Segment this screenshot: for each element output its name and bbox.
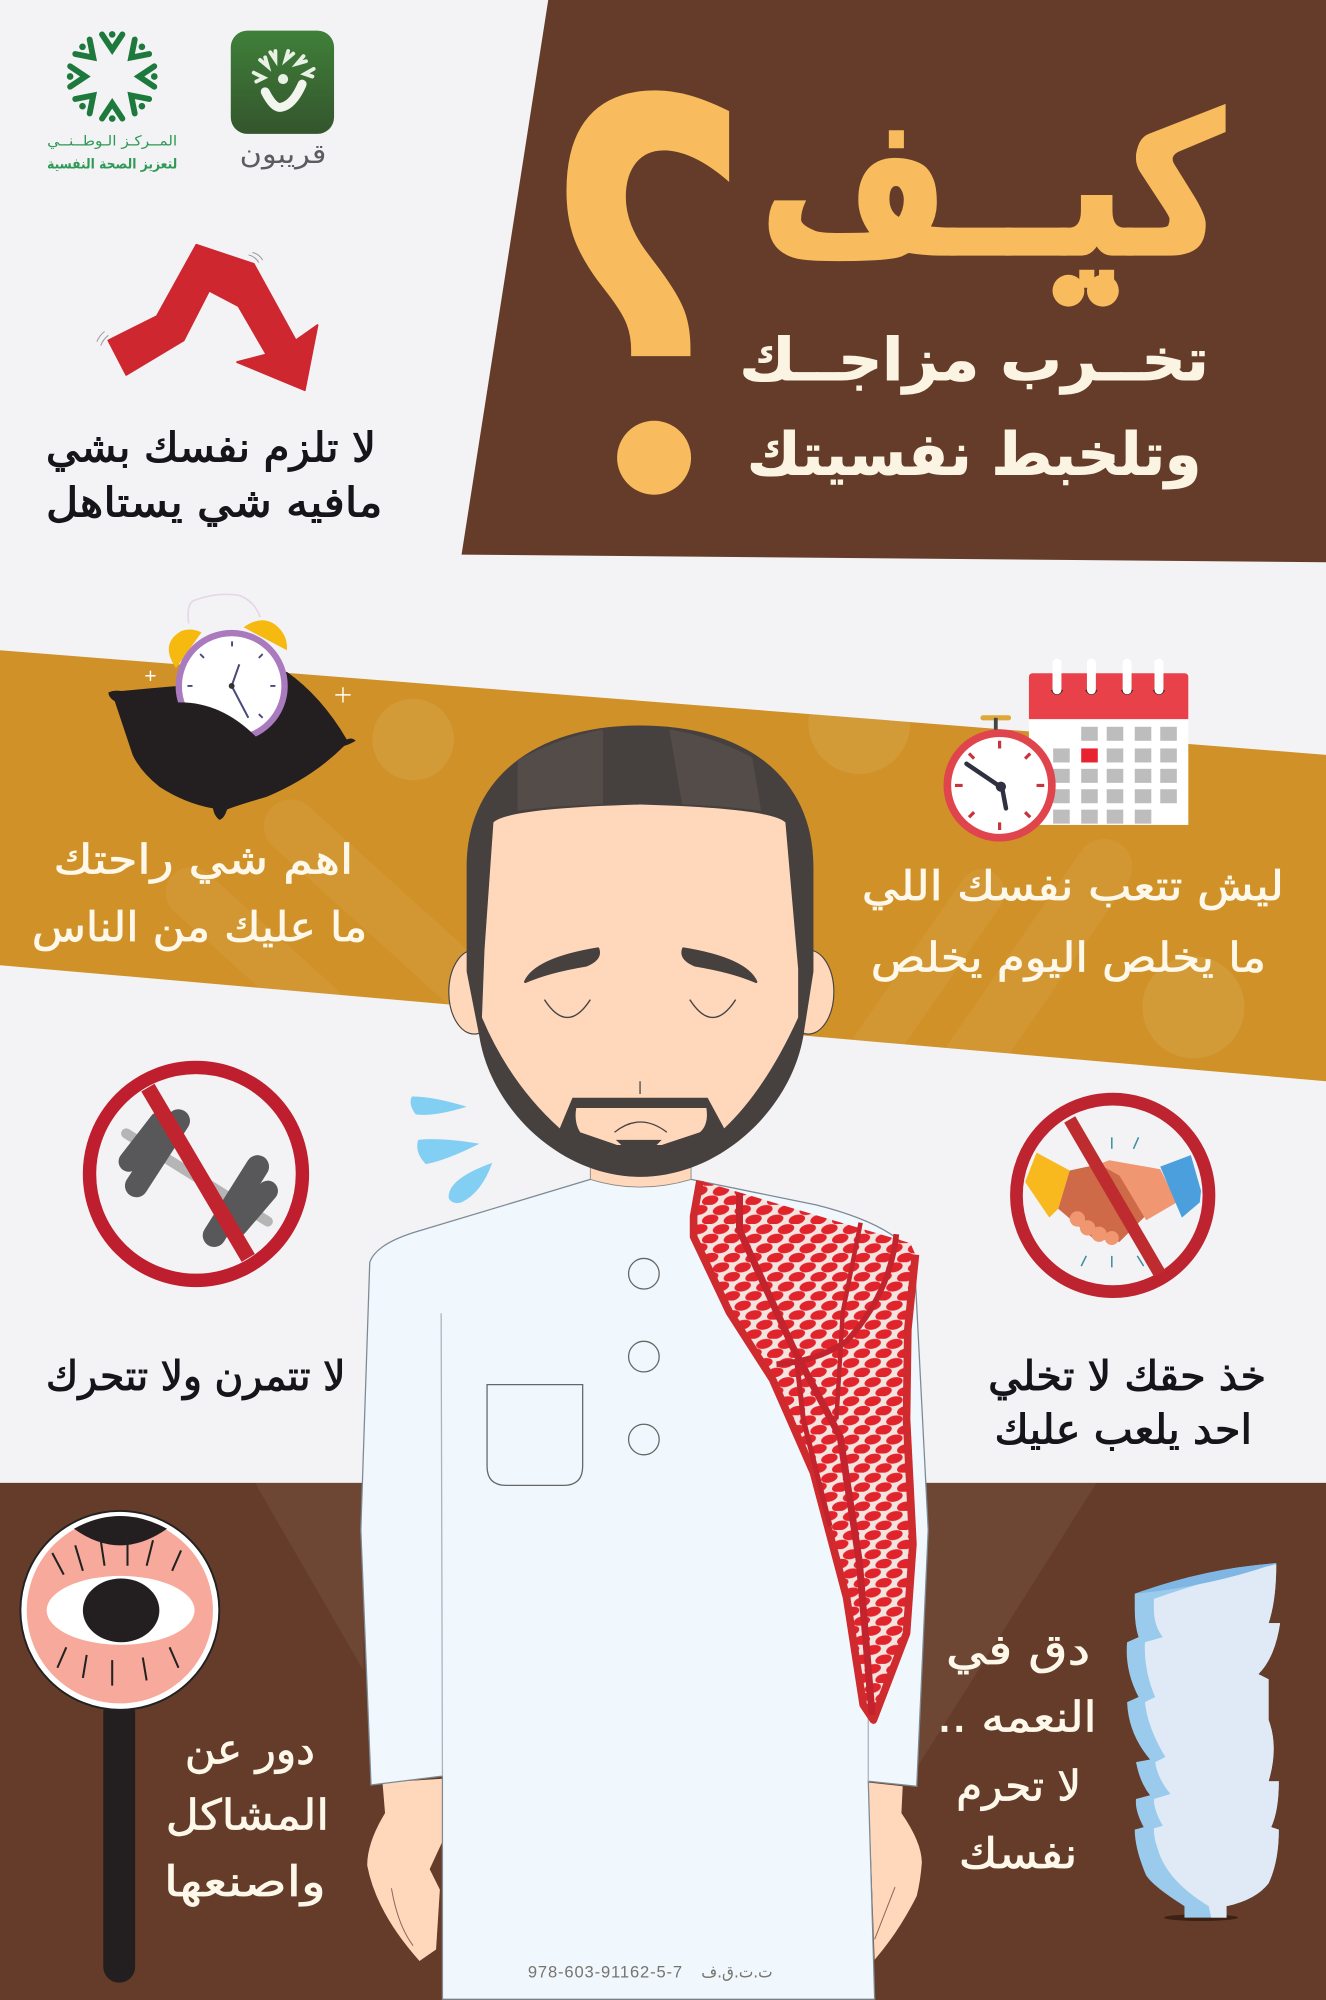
logo: qareeboon app bbox=[231, 31, 334, 170]
illustration: man bbox=[361, 725, 928, 1999]
text: isbn: ت.ت.ق.ف bbox=[701, 1963, 773, 1982]
text: your comfort matters: اهم شي راحتك bbox=[54, 835, 353, 883]
text: center name line 2: لتعزيز الصحة النفسية bbox=[47, 156, 177, 172]
closed eyes bbox=[544, 1000, 736, 1017]
text: enjoy the blessing: لا تحرم bbox=[956, 1761, 1081, 1810]
text: do not commit: مافيه شي يستاهل bbox=[46, 478, 382, 526]
ears bbox=[449, 950, 834, 1034]
panel: bottom brown band bbox=[0, 1483, 1326, 2000]
icon: calendar and stopwatch bbox=[947, 663, 1188, 838]
panel: title banner bbox=[462, 0, 1326, 562]
text: enjoy the blessing bbox=[937, 1625, 1097, 1878]
thobe bbox=[361, 1179, 928, 1999]
title: question mark bbox=[566, 90, 730, 495]
keffiyeh bbox=[694, 1181, 915, 1720]
icon: pillow and alarm clock bbox=[108, 594, 356, 820]
text: take your right: خذ حقك لا تخلي bbox=[988, 1352, 1266, 1400]
text: why tire yourself: ما يخلص اليوم يخلص bbox=[871, 934, 1266, 982]
logo: national center bbox=[47, 31, 177, 172]
text: isbn bbox=[528, 1963, 773, 1982]
neck bbox=[590, 1167, 691, 1187]
left hand bbox=[367, 1779, 445, 1961]
text: app name: قريبون bbox=[240, 139, 326, 170]
icon: no handshake bbox=[1016, 1099, 1209, 1292]
icon: stacked bowls bbox=[1127, 1563, 1280, 1921]
mouth and nose bbox=[615, 1081, 667, 1132]
text: no exercise: لا تتمرن ولا تتحرك bbox=[46, 1352, 346, 1400]
text: why tire yourself: ليش تتعب نفسك اللي bbox=[862, 862, 1284, 910]
title: subtitle line 2: وتلخبط نفسيتك bbox=[747, 420, 1201, 489]
text: look for problems: دور عن bbox=[185, 1724, 315, 1773]
panel: gold band bbox=[0, 650, 1326, 1109]
text: do not commit bbox=[46, 424, 382, 526]
face bbox=[482, 805, 798, 1128]
buttons bbox=[629, 1258, 659, 1455]
text: your comfort matters: ما عليك من الناس bbox=[32, 903, 367, 951]
text: do not commit: لا تلزم نفسك بشي bbox=[46, 424, 376, 472]
hair and beard bbox=[467, 725, 813, 1177]
icon: star ring logo bbox=[67, 31, 158, 122]
text: look for problems: واصنعها bbox=[164, 1857, 326, 1907]
eyebrows bbox=[525, 949, 756, 982]
text: center name line 1: المــركـز الـوطــنــي bbox=[47, 133, 177, 149]
text: look for problems bbox=[164, 1724, 329, 1907]
pocket bbox=[487, 1385, 583, 1485]
text: look for problems: المشاكل bbox=[166, 1791, 329, 1840]
text: take your right bbox=[988, 1352, 1266, 1453]
text: take your right: احد يلعب عليك bbox=[994, 1405, 1252, 1453]
text: enjoy the blessing: نفسك bbox=[959, 1829, 1077, 1878]
icon: red falling arrow bbox=[97, 245, 317, 390]
goatee bbox=[616, 1140, 662, 1156]
icon: magnifier with eye bbox=[20, 1511, 219, 1983]
text: isbn: 978-603-91162-5-7 bbox=[528, 1963, 682, 1982]
text: why tire yourself bbox=[862, 862, 1284, 982]
title: subtitle line 1: تخــرب مزاجــك bbox=[740, 326, 1209, 395]
text: your comfort matters bbox=[32, 835, 367, 951]
icon: no dumbbell bbox=[90, 1067, 302, 1280]
right hand bbox=[868, 1782, 922, 1960]
title: how: كيــف bbox=[760, 74, 1224, 300]
text: enjoy the blessing: دق في bbox=[946, 1625, 1090, 1675]
sweat drops bbox=[411, 1097, 492, 1203]
chin patch bbox=[576, 1108, 707, 1145]
text: enjoy the blessing: النعمه .. bbox=[937, 1692, 1097, 1741]
